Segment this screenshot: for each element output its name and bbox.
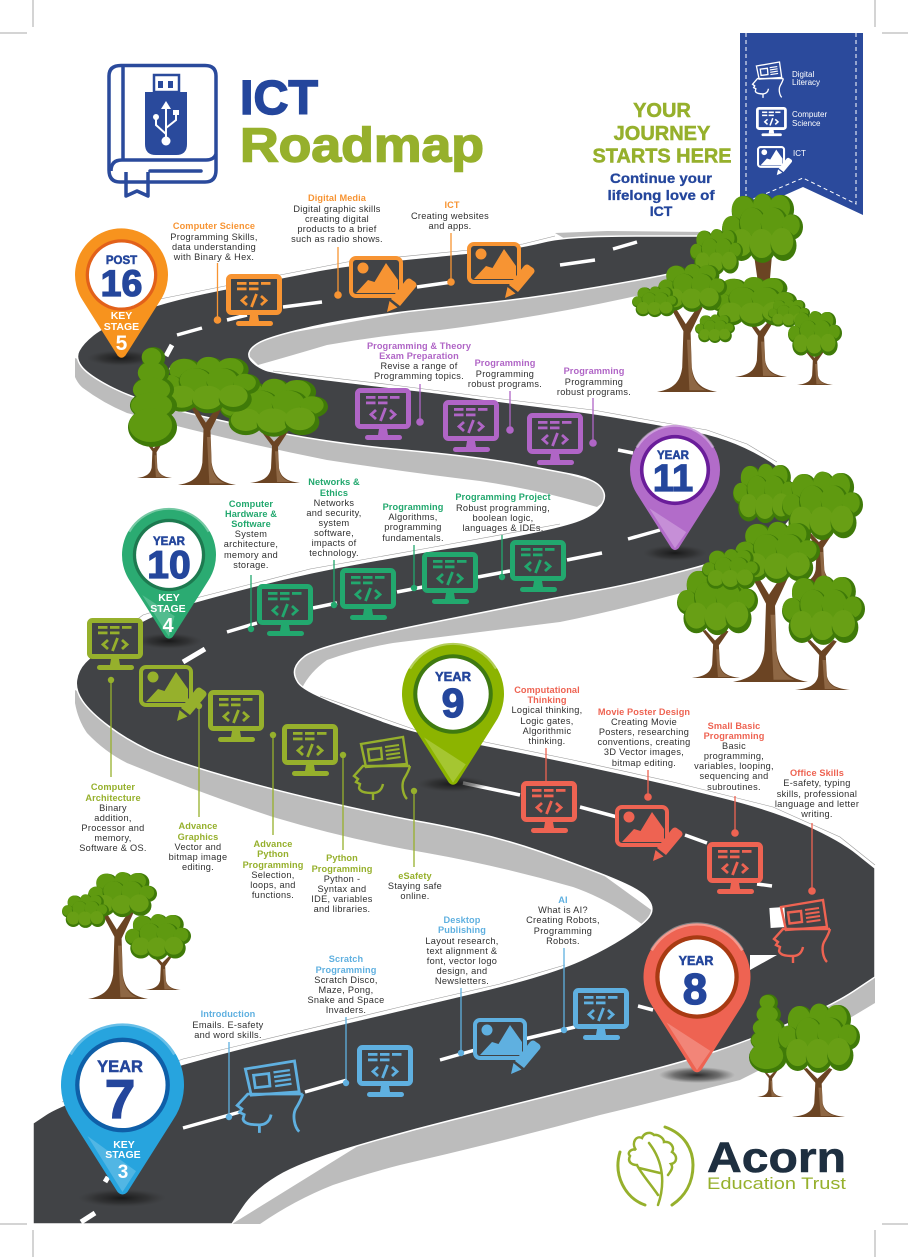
- slogan: your journey starts here: Continue your: [610, 170, 713, 186]
- topic: Movie Poster Design: Movie Poster Design: [598, 707, 690, 717]
- topic: Movie Poster Design: conventions, creating: [597, 737, 691, 747]
- topic: Digital Media: products to a brief: [297, 224, 377, 234]
- legend labels: Digital: [792, 70, 814, 79]
- topic: ICT: [411, 200, 534, 298]
- topic: Scratch Programming: Programming: [316, 965, 376, 975]
- topic: Advance Python Programming: Python: [257, 849, 289, 859]
- topic: Computer Architecture: Software & OS.: [79, 843, 147, 853]
- pin: Year 7 / Key Stage 3: [61, 1023, 184, 1207]
- topic: Programming (fundamentals): Programming: [383, 502, 443, 512]
- pin: Year 10 / Key Stage 4: 10: [147, 544, 191, 587]
- slogan: your journey starts here: YOUR: [633, 100, 691, 122]
- logo mark: oak leaf: [618, 1127, 693, 1205]
- topic: Python Programming: Python: [326, 853, 358, 863]
- slogan: your journey starts here: ICT: [650, 203, 673, 219]
- topic: Introduction: Introduction: [201, 1009, 256, 1019]
- topic: Programming & Theory Exam Preparation: [358, 341, 472, 440]
- topic: Programming (fundamentals): [382, 502, 476, 604]
- topic: Networks & Ethics: and security,: [306, 508, 362, 518]
- topic: AI: What is AI?: [538, 905, 588, 915]
- topic: Scratch Programming: Invaders.: [326, 1005, 366, 1015]
- pin: Post 16 / Key Stage 5: [75, 228, 168, 366]
- pin: Year 9: [402, 643, 504, 792]
- pin: Post 16 / Key Stage 5: 5: [116, 332, 128, 355]
- road centre dashes: [81, 242, 785, 1222]
- pin: Year 7 / Key Stage 3: STAGE: [105, 1149, 141, 1161]
- topic: Programming Project: [455, 492, 564, 592]
- topic: Computational Thinking: Thinking: [527, 695, 567, 705]
- topic: Computer Science: Programming Skills,: [170, 232, 258, 242]
- pin: Year 7 / Key Stage 3: 3: [118, 1162, 128, 1183]
- pin: Year 11: YEAR: [657, 450, 690, 462]
- topic: Desktop Publishing: Layout research,: [425, 936, 499, 946]
- topic: Programming (fundamentals): fundamentals.: [382, 533, 444, 543]
- topic: Python Programming: Syntax and: [318, 884, 366, 894]
- legend icon: computer science: [757, 108, 785, 136]
- topic: Programming (robust programs 2): robust programs.: [557, 387, 631, 397]
- topic: Small Basic Programming: Basic: [722, 741, 746, 751]
- topic: Computer Hardware & Software: Software: [231, 519, 271, 529]
- pin: Year 10 / Key Stage 4: YEAR: [153, 536, 186, 548]
- pin: Year 10 / Key Stage 4: KEY: [158, 592, 180, 604]
- topic: Computational Thinking: [512, 685, 582, 833]
- topic: Office Skills: writing.: [800, 809, 833, 819]
- topic: ICT: Creating websites: [411, 211, 489, 221]
- topic: Advance Python Programming: loops, and: [250, 880, 296, 890]
- topic: Computational Thinking: Logic gates,: [520, 716, 574, 726]
- trees: left centre: [128, 347, 328, 485]
- topic: Advance Graphics: editing.: [182, 862, 214, 872]
- topic: Computer Science: Computer Science: [173, 221, 255, 231]
- topic: Small Basic Programming: Programming: [704, 731, 764, 741]
- title: Roadmap: [240, 120, 484, 172]
- pin: Year 7 / Key Stage 3: 7: [105, 1068, 135, 1130]
- topic: Networks & Ethics: Networks: [314, 498, 354, 508]
- topic: Python Programming: Python -: [324, 874, 360, 884]
- pin: Year 11: [630, 425, 720, 561]
- topic: Programming (fundamentals): programming: [384, 522, 442, 532]
- topic: Digital Media: [291, 193, 416, 312]
- topic: Advance Python Programming: Advance: [254, 839, 292, 849]
- topic: Introduction: Emails. E-safety: [192, 1020, 264, 1030]
- pin: Year 8: [644, 923, 750, 1083]
- topic: Introduction: and word skills.: [194, 1030, 262, 1040]
- legend icon: ict: [758, 147, 792, 175]
- pin: Year 9: 9: [442, 680, 464, 726]
- slogan: your journey starts here: [592, 100, 732, 219]
- topic: Computer Architecture: Computer: [91, 782, 135, 792]
- slogan: your journey starts here: lifelong love of: [608, 187, 715, 203]
- topic: Networks & Ethics: technology.: [309, 548, 359, 558]
- topic: Desktop Publishing: design, and: [437, 966, 487, 976]
- topic: AI: Robots.: [546, 936, 580, 946]
- topic: Movie Poster Design: Posters, researching: [599, 727, 689, 737]
- slogan: your journey starts here: JOURNEY: [614, 123, 711, 145]
- topic: Programming (robust programs 1): [446, 358, 542, 452]
- legend labels: Science: [792, 119, 821, 128]
- topic: Networks & Ethics: Networks &: [308, 477, 360, 487]
- topic: eSafety: eSafety: [398, 871, 432, 881]
- topic: Computer Architecture: [79, 620, 147, 853]
- topic: Programming Project: Programming Project: [455, 492, 551, 502]
- topic: Small Basic Programming: Small Basic: [708, 721, 760, 731]
- topic: eSafety: [354, 737, 442, 901]
- topic: Digital Media: creating digital: [305, 214, 369, 224]
- topic: Office Skills: [774, 768, 859, 963]
- topic: Programming & Theory Exam Preparation: Revise a range of: [380, 361, 458, 371]
- topic: Computer Hardware & Software: System: [235, 529, 267, 539]
- trees: left lower: [62, 872, 191, 999]
- topic: Programming & Theory Exam Preparation: Programming & Theory: [367, 341, 472, 351]
- topic: Computer Hardware & Software: storage.: [233, 560, 269, 570]
- road edge hairlines: [62, 236, 875, 1102]
- topic: eSafety: Staying safe: [388, 881, 442, 891]
- topic: Digital Media: Digital Media: [308, 193, 367, 203]
- topic: Advance Graphics: Graphics: [178, 832, 218, 842]
- title: ICT: [240, 72, 318, 125]
- pin: Year 10 / Key Stage 4: STAGE: [150, 603, 186, 615]
- topic: Networks & Ethics: [306, 477, 394, 620]
- topic: Small Basic Programming: subroutines.: [707, 782, 761, 792]
- topic: Programming (robust programs 2): Programming: [564, 366, 624, 376]
- pin: Post 16 / Key Stage 5: KEY: [111, 310, 132, 322]
- legend icon: digital literacy: [753, 62, 783, 98]
- topic: Programming (robust programs 2): Programming: [565, 377, 623, 387]
- topic: Desktop Publishing: Newsletters.: [435, 976, 489, 986]
- pin: Year 11: 11: [653, 458, 693, 500]
- pin: Year 10 / Key Stage 4: 4: [162, 615, 174, 637]
- topic: Networks & Ethics: software,: [314, 528, 354, 538]
- topic: Small Basic Programming: [694, 721, 774, 894]
- topic: Programming (fundamentals): Algorithms,: [388, 512, 438, 522]
- topic: Small Basic Programming: variables, looping,: [694, 761, 774, 771]
- topic: Introduction: [192, 1009, 303, 1133]
- topic: ICT: and apps.: [428, 221, 472, 231]
- topic: Desktop Publishing: font, vector logo: [427, 956, 497, 966]
- topic: Advance Graphics: Vector and: [175, 842, 221, 852]
- topic: Computer Science: with Binary & Hex.: [173, 252, 254, 262]
- topic: Scratch Programming: Snake and Space: [307, 995, 385, 1005]
- topic: Computer Hardware & Software: Hardware &: [225, 509, 277, 519]
- topic: Scratch Programming: [307, 954, 410, 1097]
- topic: Office Skills: E-safety, typing: [783, 778, 851, 788]
- pin: Post 16 / Key Stage 5: 16: [101, 262, 142, 304]
- trees: right middle: [677, 464, 865, 690]
- asphalt: [33, 236, 875, 1224]
- topic: Computer Hardware & Software: [224, 499, 310, 636]
- legend labels: [792, 70, 827, 158]
- trees: bottom right: [749, 994, 860, 1117]
- topic: Desktop Publishing: [425, 915, 540, 1074]
- topic: Movie Poster Design: [597, 707, 691, 861]
- legend labels: Literacy: [792, 78, 820, 87]
- pin: Post 16 / Key Stage 5: POST: [106, 255, 137, 267]
- topic: Computer Hardware & Software: architecture,: [224, 539, 278, 549]
- logo: Acorn Education Trust: [618, 1127, 846, 1205]
- topic: Office Skills: Office Skills: [790, 768, 844, 778]
- topic: Programming (robust programs 1): robust programs.: [468, 379, 542, 389]
- topic: Movie Poster Design: bitmap editing.: [612, 758, 676, 768]
- topic: Programming Project: languages & IDEs.: [462, 523, 544, 533]
- topic: Office Skills: skills, professional: [777, 789, 857, 799]
- topic: Computer Hardware & Software: memory and: [224, 550, 278, 560]
- topic: Movie Poster Design: Creating Movie: [611, 717, 677, 727]
- logo: Acorn Education Trust: Acorn: [707, 1134, 846, 1182]
- topic: Advance Graphics: [141, 667, 227, 872]
- pin: Post 16 / Key Stage 5: STAGE: [104, 321, 139, 333]
- topic: Advance Python Programming: functions.: [252, 890, 294, 900]
- topic: AI: Programming: [534, 926, 592, 936]
- topic: Computational Thinking: Logical thinking,: [512, 705, 582, 715]
- slogan: your journey starts here: STARTS HERE: [592, 146, 732, 168]
- topic: Programming (robust programs 1): Programming: [476, 369, 534, 379]
- topic: eSafety: online.: [400, 891, 430, 901]
- topic: AI: Creating Robots,: [526, 915, 600, 925]
- topic: Networks & Ethics: Ethics: [320, 488, 348, 498]
- topic: Advance Python Programming: Selection,: [251, 870, 295, 880]
- topic: Desktop Publishing: text alignment &: [427, 946, 497, 956]
- topic: AI: AI: [558, 895, 568, 905]
- topic: Desktop Publishing: Desktop: [444, 915, 481, 925]
- topic: Programming (robust programs 2): [530, 366, 631, 465]
- topic: Networks & Ethics: impacts of: [312, 538, 357, 548]
- topic: Desktop Publishing: Publishing: [438, 925, 486, 935]
- legend labels: ICT: [793, 149, 806, 158]
- logo: Acorn Education Trust: Education Trust: [707, 1175, 846, 1193]
- topic: Digital Media: such as radio shows.: [291, 234, 383, 244]
- topic: Computational Thinking: Algorithmic: [523, 726, 571, 736]
- topic: AI: [526, 895, 626, 1040]
- pin: Year 10 / Key Stage 4: [122, 508, 216, 649]
- topic: Computer Science: [170, 221, 280, 326]
- topic: Computer Architecture: Architecture: [85, 793, 141, 803]
- topic: Python Programming: and libraries.: [314, 904, 370, 914]
- topic: Scratch Programming: Maze, Pong,: [319, 985, 373, 995]
- pin: Year 8: YEAR: [679, 954, 713, 968]
- topic: Computational Thinking: thinking.: [529, 736, 565, 746]
- legend labels: Computer: [792, 110, 827, 119]
- topic: Scratch Programming: Scratch Disco,: [314, 975, 378, 985]
- logo: book with USB stick: [109, 66, 216, 196]
- topic: Programming Project: Robust programming,: [456, 503, 550, 513]
- topic: Computer Architecture: addition,: [94, 813, 132, 823]
- topic: Computer Science: data understanding: [172, 242, 256, 252]
- topic: Python Programming: [284, 726, 373, 914]
- topic: Advance Graphics: bitmap image: [169, 852, 227, 862]
- pin: Year 7 / Key Stage 3: YEAR: [97, 1058, 143, 1076]
- topic: Programming Project: boolean logic,: [473, 513, 533, 523]
- topic: Advance Python Programming: [210, 692, 303, 900]
- topic: Computer Architecture: Processor and: [81, 823, 145, 833]
- topic: Computational Thinking: Computational: [514, 685, 580, 695]
- topic: ICT: ICT: [444, 200, 460, 210]
- pin: Year 7 / Key Stage 3: KEY: [113, 1139, 135, 1151]
- topic: Advance Graphics: Advance: [178, 821, 218, 831]
- topic: Office Skills: language and letter: [775, 799, 859, 809]
- topic: Computer Architecture: Binary: [99, 803, 127, 813]
- topic: Scratch Programming: Scratch: [329, 954, 363, 964]
- topic: Computer Architecture: memory,: [94, 833, 132, 843]
- road: [33, 231, 875, 1224]
- topic: Python Programming: Programming: [312, 864, 372, 874]
- banner: legend: [740, 33, 863, 215]
- road side walls: [75, 231, 875, 1224]
- topic: Small Basic Programming: sequencing and: [699, 771, 769, 781]
- topic: Movie Poster Design: 3D Vector images,: [604, 747, 684, 757]
- topic: Advance Python Programming: Programming: [243, 860, 303, 870]
- topic: Small Basic Programming: programming,: [704, 751, 764, 761]
- title: [240, 72, 484, 172]
- topic: Digital Media: Digital graphic skills: [293, 204, 381, 214]
- topic: Python Programming: IDE, variables: [311, 894, 373, 904]
- topic: Programming & Theory Exam Preparation: Programming topics.: [374, 371, 464, 381]
- topic: Programming (robust programs 1): Programming: [475, 358, 535, 368]
- topic: Programming & Theory Exam Preparation: Exam Preparation: [379, 351, 459, 361]
- trees: top right: [632, 194, 842, 392]
- topic: Networks & Ethics: system: [319, 518, 349, 528]
- pin: Year 9: YEAR: [435, 669, 472, 684]
- pin: Year 8: 8: [683, 965, 707, 1014]
- topic: Computer Hardware & Software: Computer: [229, 499, 273, 509]
